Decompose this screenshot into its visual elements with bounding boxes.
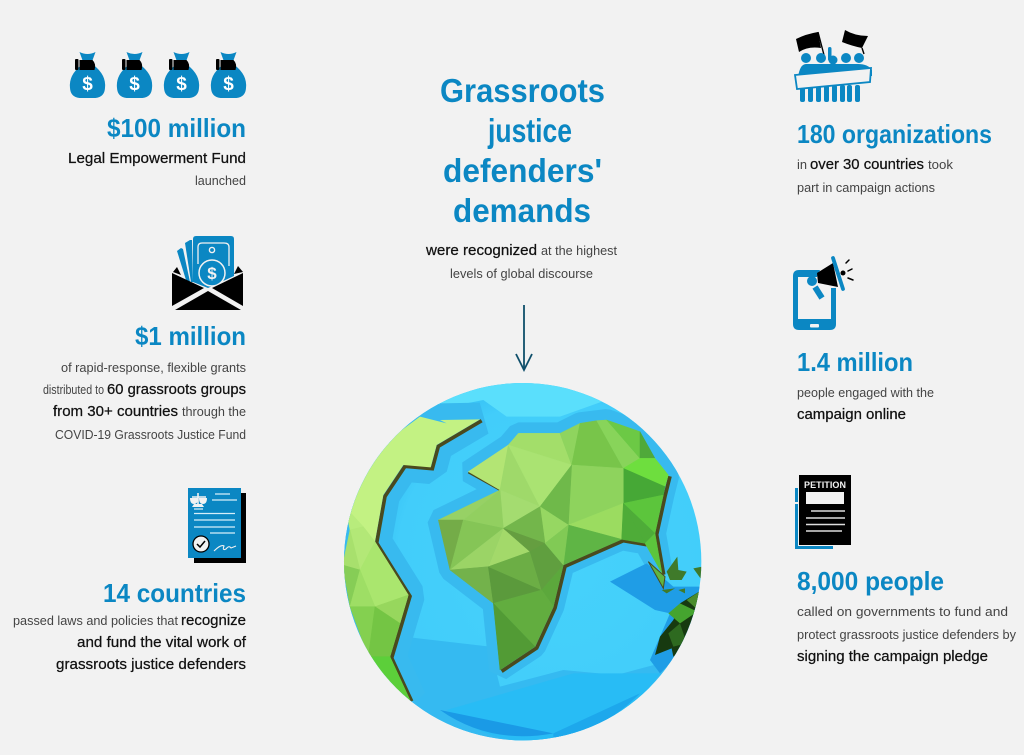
subtitle: levels of global discourse — [450, 267, 593, 281]
text: laws description: passed laws and policies that — [13, 614, 179, 628]
text: grants description: from 30+ countries — [53, 403, 178, 420]
text: laws description: and fund the vital work of — [77, 634, 247, 651]
title — [440, 72, 605, 229]
stat: $100 million: $100 million — [107, 113, 246, 143]
polar light water — [426, 383, 645, 432]
text: online description: people engaged with the — [797, 386, 934, 400]
text: online description — [797, 386, 934, 423]
text: legal empowerment fund launched: Legal Empowerment Fund — [68, 150, 246, 167]
title: justice — [487, 112, 572, 149]
south-east land — [655, 590, 702, 657]
south-east water — [610, 563, 702, 673]
panel: legal empowerment fund — [68, 52, 246, 188]
title: Grassroots — [440, 72, 605, 109]
small island — [648, 562, 665, 588]
title: demands — [453, 192, 591, 229]
west coast shadow — [377, 421, 482, 701]
text: grants description: through the — [182, 405, 246, 419]
stat: 180 organizations: 180 organizations — [797, 119, 992, 149]
text: online description: campaign online — [797, 406, 906, 423]
subtitle: at the highest — [541, 244, 618, 258]
icon: petition document — [796, 475, 851, 548]
text: organizations description: part in campaign actions — [797, 181, 935, 195]
stat: 1.4 million: 1.4 million — [797, 347, 913, 377]
arrow — [516, 305, 532, 370]
text: laws description — [13, 612, 247, 673]
coastal halo: west — [343, 417, 480, 700]
east inlet shadow — [468, 472, 501, 490]
text: organizations description: took — [928, 158, 954, 172]
east continent — [438, 420, 668, 670]
panel: rapid-response grants — [43, 236, 246, 442]
subtitle: were recognized — [425, 242, 537, 259]
text: laws description: recognize — [181, 612, 246, 629]
text: petition description — [797, 605, 1017, 665]
panel: laws and policies — [13, 488, 247, 673]
islands — [662, 557, 702, 593]
stat: 8,000 people: 8,000 people — [797, 566, 944, 596]
icon: petition document: PETITION — [804, 480, 846, 490]
text: legal empowerment fund launched: launched — [195, 174, 246, 188]
text: grants description: 60 grassroots groups — [107, 381, 246, 398]
stat: 14 countries: 14 countries — [103, 578, 246, 608]
icon: protest crowd — [795, 30, 872, 102]
text: grants description: COVID-19 Grassroots Justice Fund — [55, 428, 246, 442]
text: organizations description — [797, 156, 954, 195]
text: grants description: distributed to — [43, 383, 104, 397]
title: defenders' — [443, 152, 602, 189]
water shading south — [403, 637, 680, 742]
text: organizations description: in — [797, 158, 807, 172]
text: petition description: called on governments to fund and — [797, 605, 1008, 619]
text: legal empowerment fund launched — [68, 150, 246, 188]
stat: $1 million: $1 million — [135, 321, 246, 351]
east coast shadow — [502, 476, 670, 671]
subtitle — [425, 242, 618, 281]
text: organizations description: over 30 countries — [810, 156, 924, 173]
panel: online engagement — [793, 258, 934, 423]
text: grants description — [43, 361, 246, 442]
icon: envelope with money — [172, 236, 243, 310]
icon: money bags — [70, 52, 246, 98]
text: grants description: of rapid-response, flexible grants — [61, 361, 246, 375]
text: petition description: signing the campaign pledge — [797, 648, 988, 665]
panel: organizations — [795, 30, 992, 195]
panel: petition — [796, 475, 1017, 665]
icon: envelope with money: $ — [207, 264, 217, 283]
icon: phone with megaphone — [793, 258, 853, 330]
coastal halo: east — [438, 420, 668, 670]
globe — [343, 380, 702, 742]
text: laws description: grassroots justice defenders — [56, 656, 246, 673]
icon: legal document — [188, 488, 246, 563]
text: petition description: protect grassroots justice defenders by — [797, 628, 1017, 642]
left continent — [343, 417, 480, 700]
